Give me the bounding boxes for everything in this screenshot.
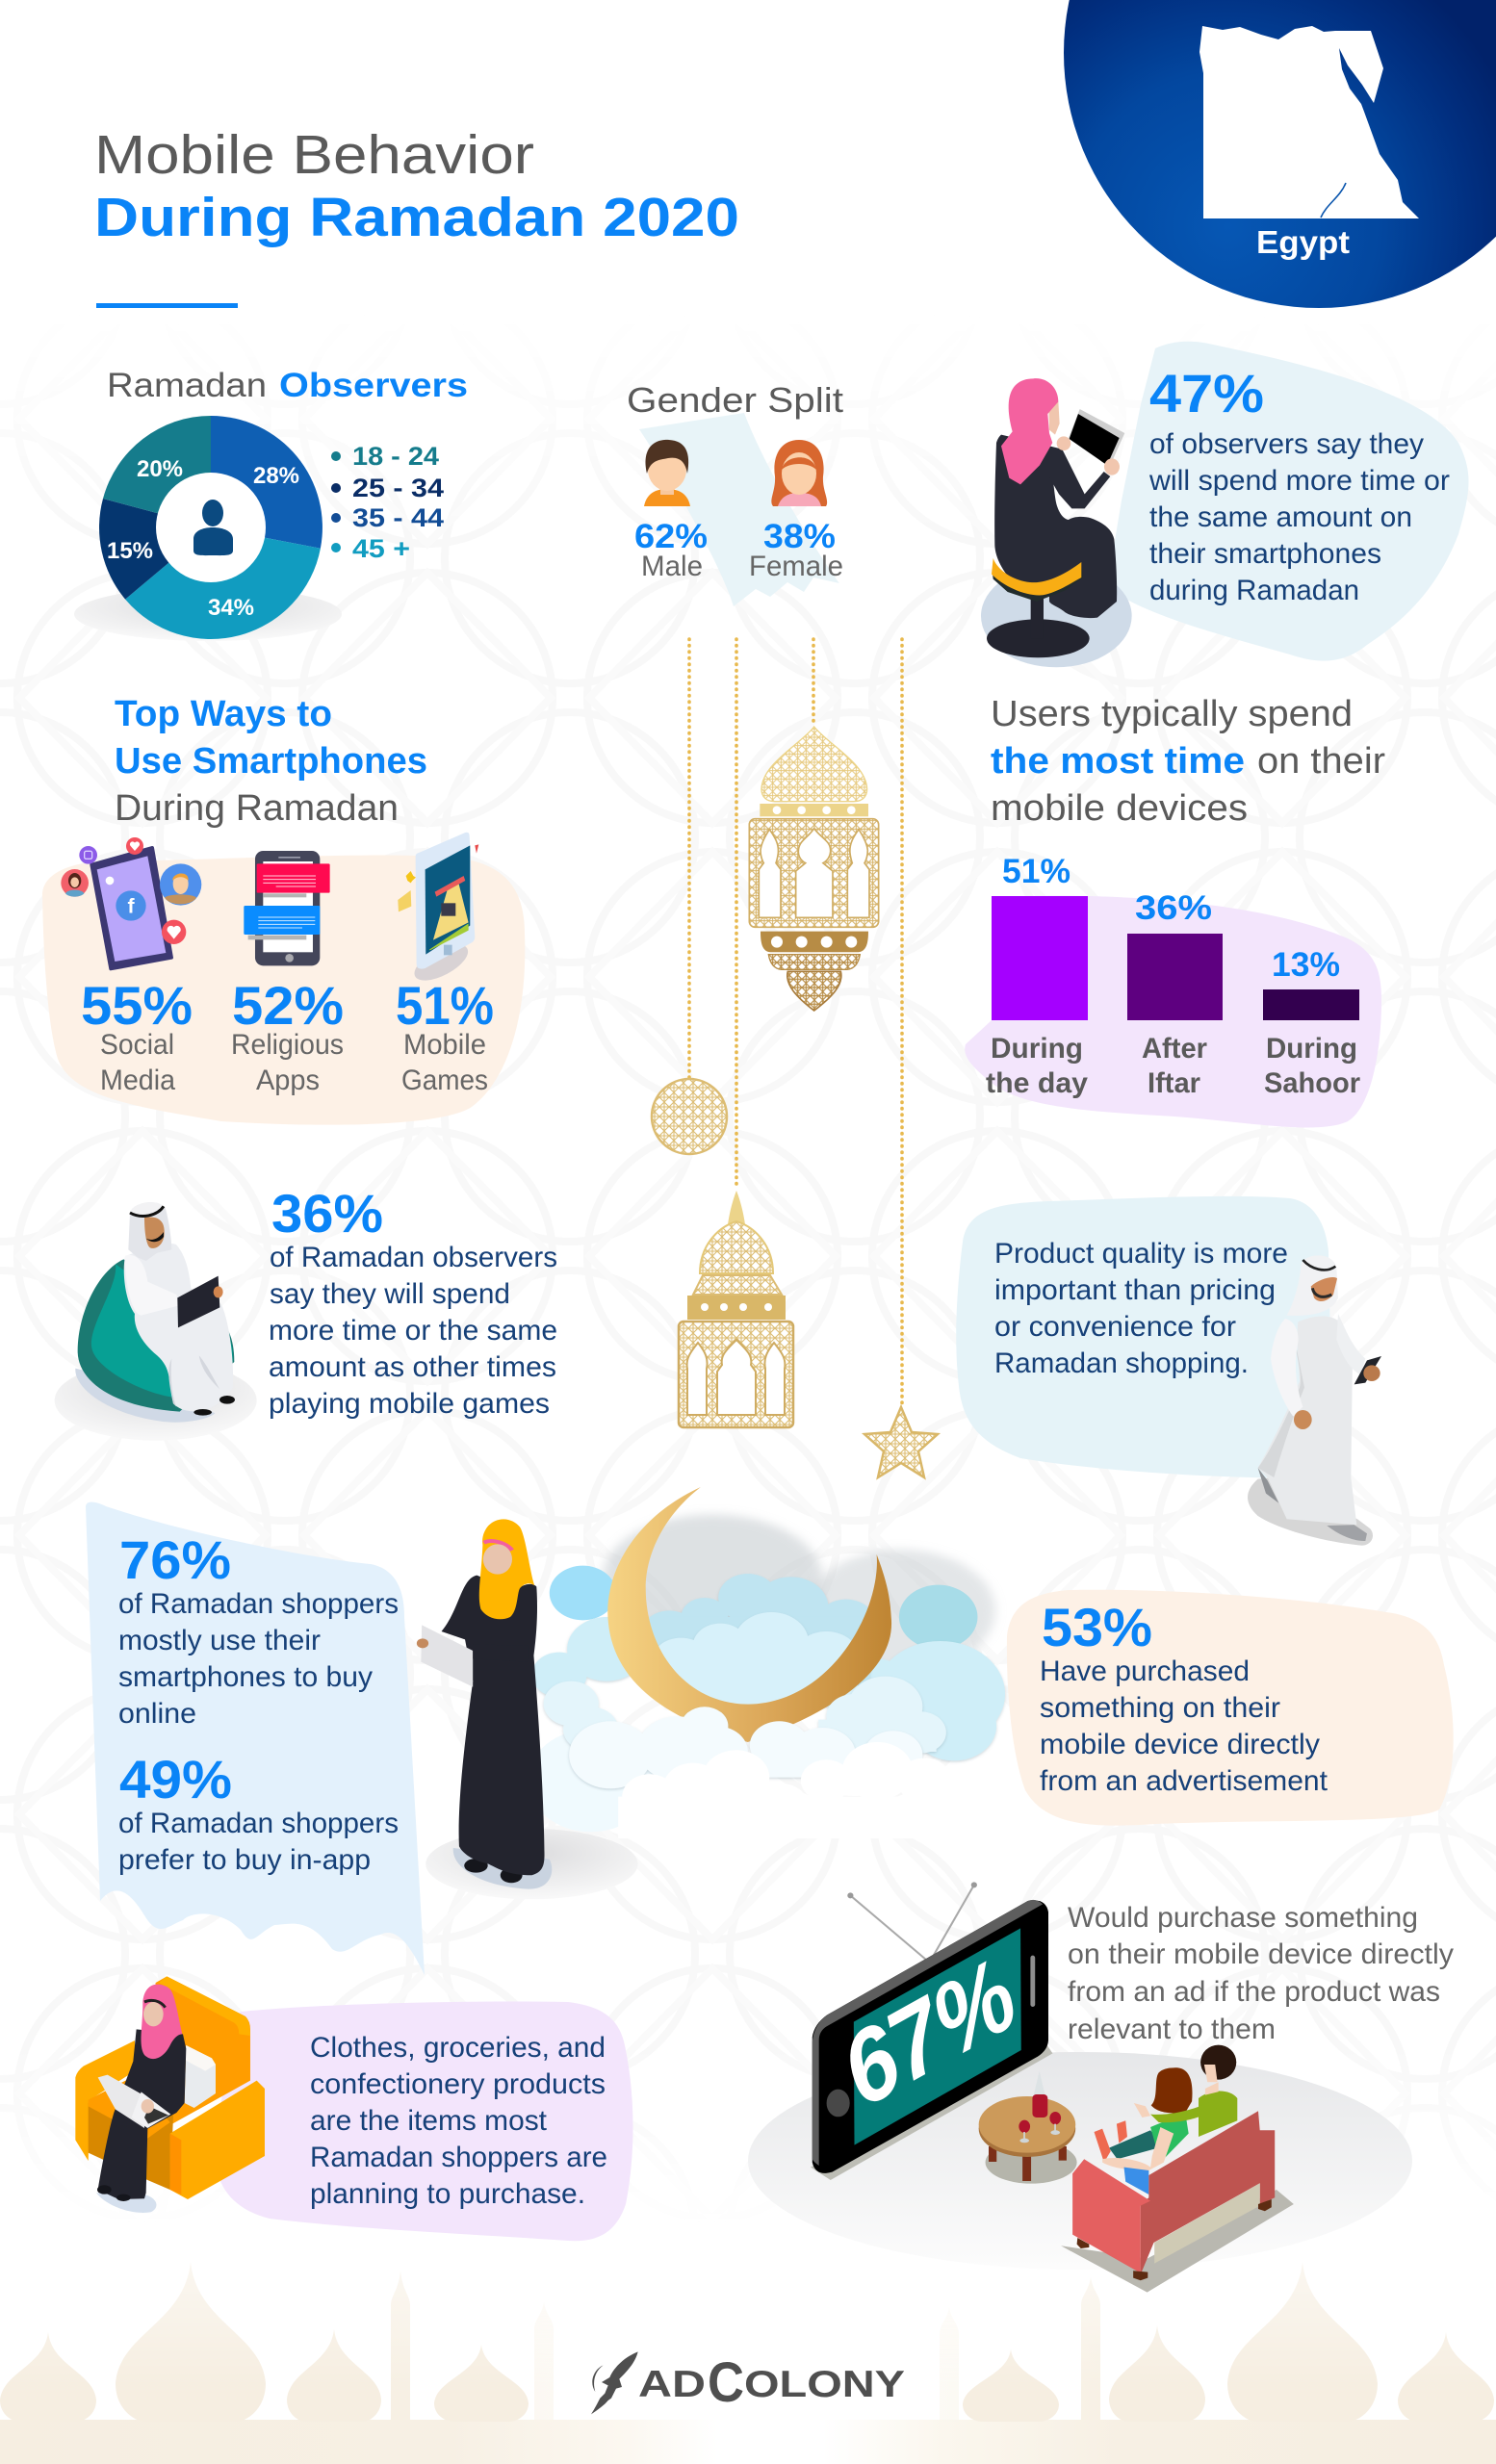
bar chart [986,853,1360,1099]
icon: person [193,500,233,555]
sofa shadow [1061,2190,1294,2293]
lantern 1 [749,727,879,1011]
stat 47%: 47% [1149,363,1264,424]
text: 49 percent: of Ramadan shoppers [118,1808,399,1839]
body text [994,1238,1288,1379]
icon: standing woman with tablet [417,1519,638,1899]
label: Egypt: Egypt [1256,224,1350,260]
lantern ball [652,1079,727,1154]
panel: ramadan observers [74,367,468,641]
stats and labels: Games [401,1065,488,1096]
legend: 45 + [352,534,410,563]
tv body [812,1900,1048,2173]
icon: man on bean bag [55,1202,257,1441]
stat: male [634,518,708,582]
text: 49 percent: prefer to buy in-app [118,1844,371,1876]
body text: something on their [1040,1692,1280,1724]
panel: items shoppers plan to buy [75,1976,632,2241]
icon: social phone [61,837,201,969]
illustration: tv, table and couple [811,1882,1294,2293]
donut chart: 34% [208,595,254,621]
blob [86,1502,425,1975]
donut chart: 28% [253,463,299,489]
wordmark [638,2351,905,2414]
heading: Use Smartphones [115,741,427,782]
gender backdrop [639,413,839,606]
blob [956,1196,1333,1478]
body text: mobile device directly [1040,1729,1320,1760]
panel: top ways to use smartphones [42,694,525,1125]
body text: of Ramadan observers [270,1242,557,1273]
bar chart: During [1266,1033,1357,1065]
donut chart: 20% [137,456,183,482]
lantern 2 [679,1191,793,1427]
floor ellipse [748,2052,1412,2270]
body text: of observers say they [1149,428,1424,460]
body text: Clothes, groceries, and [310,2032,606,2064]
panel: 67 percent tv scene [748,1882,1454,2293]
text: 49 percent [118,1808,399,1876]
bar chart: Sahoor [1264,1067,1360,1099]
body text: Have purchased [1040,1656,1250,1687]
crescent moon and clouds [528,1487,1005,1838]
body text: important than pricing [994,1274,1276,1306]
body text: during Ramadan [1149,575,1359,606]
body text: confectionery products [310,2068,606,2100]
panel: 36 percent mobile games [55,1183,557,1441]
legend: 25 - 34 [352,474,444,502]
heading [115,694,427,829]
purple blob [215,2001,633,2241]
body text: are the items most [310,2105,548,2137]
legend: 18 - 24 [352,442,439,471]
body text [1148,428,1450,606]
body text: from an advertisement [1040,1765,1328,1797]
body text [1040,1656,1328,1797]
body text: Ramadan shopping. [994,1348,1249,1379]
logo: adcolony [591,2351,905,2414]
stat 36%: 36% [271,1183,383,1244]
heading: on their [1257,741,1385,782]
stats and labels: Media [100,1065,175,1096]
body text [310,2032,607,2210]
stat: female: 38% [763,518,836,555]
stat 49%: 49% [119,1749,232,1810]
body text: relevant to them [1068,2014,1276,2045]
stats and labels: Mobile [403,1029,486,1061]
title: Mobile Behavior [94,124,534,186]
sofa [1072,2111,1275,2280]
wordmark: C [708,2351,744,2414]
icon: male [644,440,690,506]
wordmark: AD [638,2364,706,2405]
stats and labels: 52% [232,975,344,1036]
background lattice pattern [0,308,1496,2233]
title [94,124,739,248]
icon: woman on yellow armchair [75,1976,265,2213]
bottom mosque skyline [0,2262,1496,2464]
hanging strings [689,639,902,1407]
body text [1068,1902,1454,2045]
stat: male: 62% [634,518,708,555]
panel: 47 percent observers [981,342,1469,667]
table [986,2142,1077,2184]
body text: planning to purchase. [310,2178,585,2210]
icon: standing man with phone [1248,1255,1381,1546]
text: 76 percent: mostly use their [118,1625,321,1656]
blob [1107,342,1469,661]
bar chart: 36% [1135,889,1212,927]
bar chart: After [1142,1033,1207,1065]
icon: mobile games tablet [398,833,478,988]
couple [1095,2045,1237,2194]
icon: religious apps phone [244,851,330,965]
heading: Ramadan [107,367,267,404]
body text: amount as other times [269,1351,556,1383]
tv percentage: 67% [827,1937,1031,2130]
panel: product quality [956,1196,1381,1546]
panel: 53 percent purchased [1007,1590,1454,1826]
body text: Product quality is more [994,1238,1288,1270]
heading [107,367,468,404]
text: 76 percent: online [118,1698,196,1730]
stat: female [749,518,843,582]
stat 76%: 76% [119,1529,231,1590]
stats and labels: 51% [396,975,494,1036]
stat: male: Male [641,551,703,582]
heading: mobile devices [991,788,1248,829]
bar chart: 13% [1272,946,1340,984]
body text: say they will spend [270,1278,510,1310]
body text: playing mobile games [269,1388,550,1420]
bar chart: Iftar [1148,1067,1200,1099]
body text: Ramadan shoppers are [310,2142,607,2173]
heading: the most time [991,741,1245,782]
body text: the same amount on [1149,501,1412,533]
text: 76 percent [118,1588,399,1730]
stats and labels: 55% [81,975,193,1036]
body text [269,1242,557,1420]
text: 76 percent: smartphones to buy [118,1661,373,1693]
heading [991,694,1385,829]
heading: Gender Split [627,380,843,420]
blob [1007,1590,1454,1826]
icon: social phone: f [127,895,135,918]
stats and labels [81,975,494,1096]
heading: Top Ways to [115,694,332,734]
stats and labels: Apps [256,1065,320,1096]
icon: egypt map [1199,26,1419,218]
icon: rocket [591,2351,638,2414]
heading: Observers [279,367,468,404]
donut chart: 15% [107,538,153,564]
legend [331,442,444,563]
stats and labels: Social [100,1029,174,1061]
lantern star [864,1407,938,1477]
stat: female: Female [749,551,843,582]
icon: seated woman with tablet [981,378,1132,667]
body text: more time or the same [269,1315,557,1347]
panel: 76 and 49 percent shoppers [86,1502,425,1975]
bar chart: During [991,1033,1083,1065]
donut chart [99,416,322,639]
icon: female [771,440,827,506]
body text: on their mobile device directly [1068,1938,1454,1970]
bar chart: 51% [1002,853,1070,890]
body text: Would purchase something [1068,1902,1418,1934]
stat 53%: 53% [1042,1597,1152,1657]
body text: their smartphones [1149,538,1381,570]
heading: Users typically spend [991,694,1353,734]
pie shadow [74,587,342,641]
text: 76 percent: of Ramadan shoppers [118,1588,399,1620]
purple blob [965,896,1381,1127]
wordmark: OLONY [744,2364,905,2405]
title: During Ramadan 2020 [94,187,739,248]
peach blob [42,856,525,1125]
title underline [96,303,238,308]
stats and labels: Religious [231,1029,344,1061]
body text: from an ad if the product was [1068,1976,1440,2008]
bar chart: the day [986,1067,1088,1099]
body text: or convenience for [994,1311,1236,1343]
panel: most time on mobile devices [965,694,1385,1127]
egypt map circle [1064,0,1496,308]
body text: will spend more time or [1148,465,1450,497]
panel: gender split [627,380,843,606]
heading: During Ramadan [115,788,399,829]
legend: 35 - 44 [352,503,444,532]
